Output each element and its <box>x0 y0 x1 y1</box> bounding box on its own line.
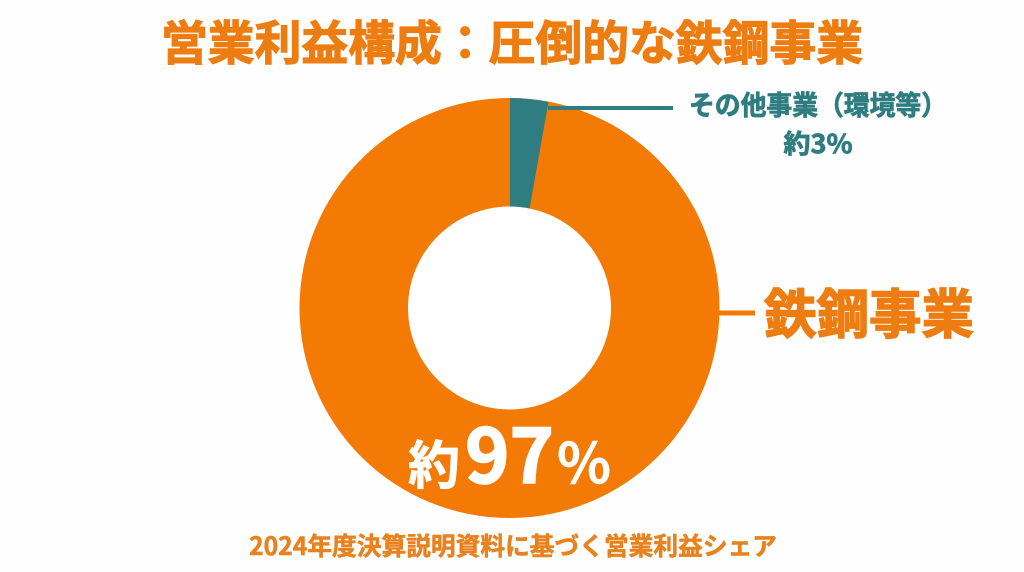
label: steel business: 鉄鋼事業 <box>764 273 974 349</box>
value: about 97%: 97 <box>465 396 554 505</box>
value: about 97%: % <box>557 419 611 500</box>
segment: other business 3% <box>510 98 548 209</box>
segment: steel business 97% <box>300 98 720 518</box>
donut hole <box>408 206 611 410</box>
donut chart <box>300 98 720 518</box>
value: about 97% <box>408 396 611 505</box>
footnote: 2024年度決算説明資料に基づく営業利益シェア <box>249 527 777 563</box>
label: other business: 約3% <box>784 124 852 161</box>
label: other business: その他事業（環境等） <box>689 84 947 123</box>
label: other business <box>689 84 947 161</box>
value: about 97%: 約 <box>408 424 460 499</box>
title: 営業利益構成：圧倒的な鉄鋼事業 <box>161 5 863 74</box>
leader line: steel business <box>719 310 755 316</box>
leader line: other business <box>548 106 673 110</box>
